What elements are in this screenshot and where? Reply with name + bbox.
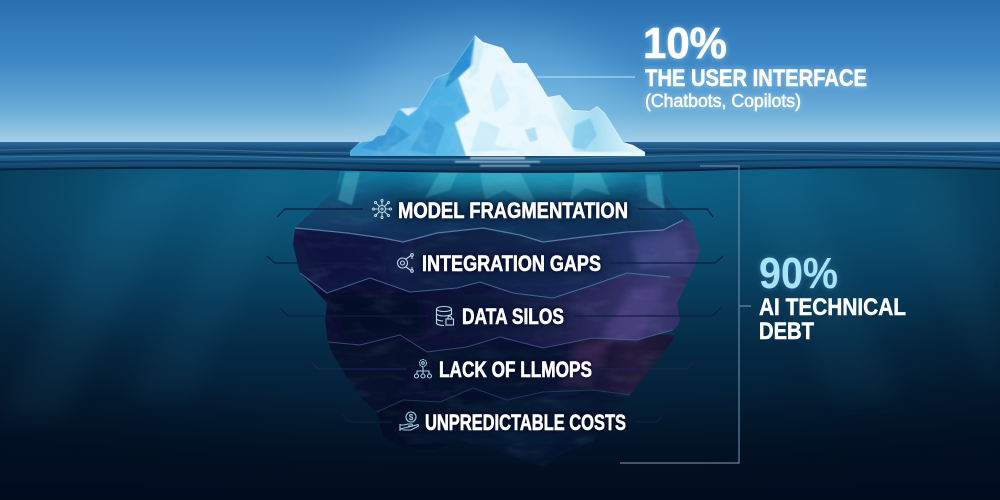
left blue faces xyxy=(345,35,640,160)
dark halo behind labels xyxy=(385,198,635,436)
layer connector lines xyxy=(267,209,723,422)
text: UNPREDICTABLE COSTS xyxy=(425,410,626,435)
subheading: AI technical debt: AI TECHNICAL xyxy=(759,294,906,321)
subheading: the user interface: THE USER INTERFACE xyxy=(645,65,867,92)
icon: hand holding coin: $ xyxy=(409,413,414,422)
text: INTEGRATION GAPS xyxy=(422,251,601,276)
underwater iceberg xyxy=(293,171,700,467)
sky glow behind iceberg xyxy=(360,30,620,170)
icon: database with lock xyxy=(436,306,454,326)
bracket: 90% span xyxy=(620,166,751,463)
ice ridges xyxy=(295,220,683,412)
callout: 10% the user interface xyxy=(643,19,867,111)
subheading: AI technical debt: DEBT xyxy=(759,318,814,345)
label: data silos xyxy=(436,304,564,329)
layer 2 xyxy=(285,215,710,298)
text: MODEL FRAGMENTATION xyxy=(398,198,628,223)
water surface xyxy=(0,142,1000,172)
icon: integration links xyxy=(398,254,413,272)
layer 5 xyxy=(377,388,595,467)
iceberg tip above water xyxy=(345,30,650,160)
sky background xyxy=(0,0,1000,142)
callout: 90% AI technical debt xyxy=(759,249,906,345)
subheading: AI technical debt xyxy=(759,294,906,345)
right light face xyxy=(548,95,640,152)
label: integration gaps xyxy=(398,251,601,276)
text: LACK OF LLMOPS xyxy=(439,357,592,382)
ice facets, top layer xyxy=(338,172,665,210)
deep sea background xyxy=(0,166,1000,500)
label: lack of llmops xyxy=(414,357,592,382)
icon: org chart with gear xyxy=(414,360,432,378)
icon: hand holding coin xyxy=(400,412,418,431)
text: DATA SILOS xyxy=(462,304,564,329)
heading: 90%: 90% xyxy=(759,249,838,298)
label: model fragmentation xyxy=(372,198,628,223)
label: unpredictable costs xyxy=(400,410,626,435)
heading: 10%: 10% xyxy=(643,19,727,68)
layer 3 xyxy=(290,265,710,352)
leader line: 10% xyxy=(537,76,635,78)
note: chatbots, copilots: (Chatbots, Copilots) xyxy=(645,91,801,111)
icon: network nodes xyxy=(372,200,392,218)
layer 4 xyxy=(320,335,690,412)
layer 1 xyxy=(290,170,695,242)
